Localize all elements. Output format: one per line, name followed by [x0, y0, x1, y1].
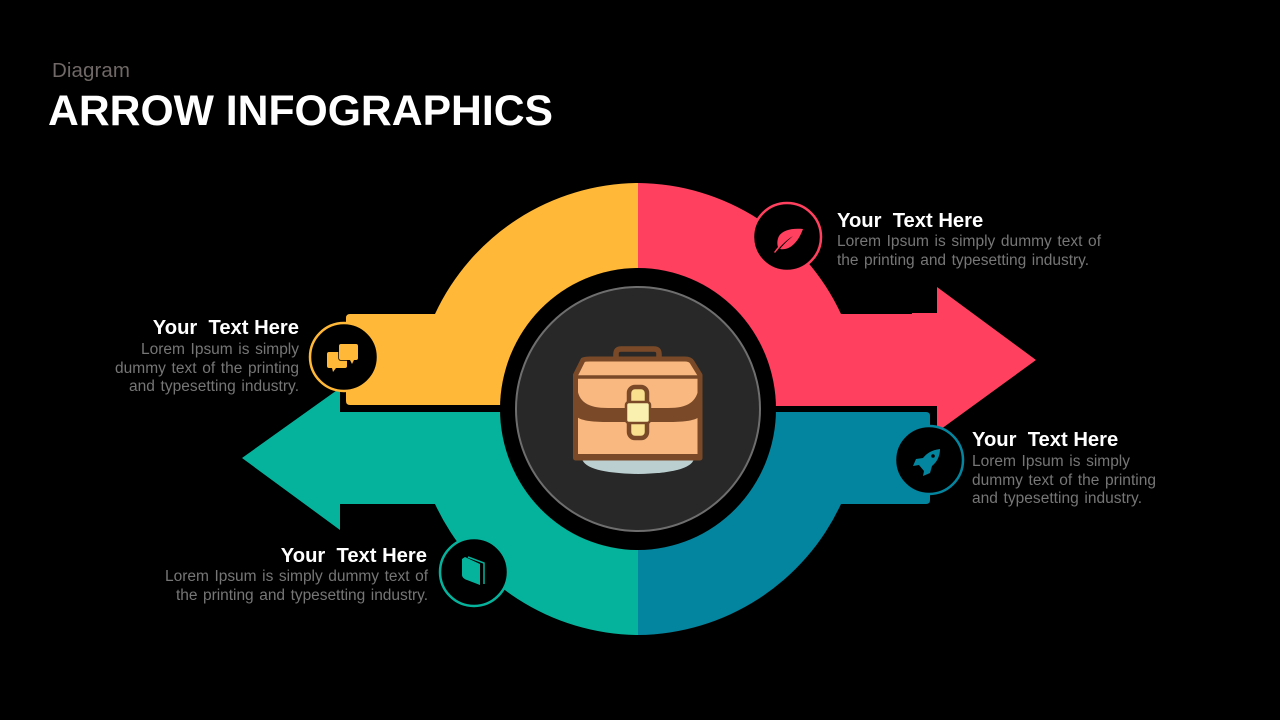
text block: bottom left: the printing and typesetting industry.: [176, 587, 428, 604]
text block: right: Lorem Ipsum is simply: [972, 453, 1130, 470]
text block: left: Your Text Here: [153, 317, 299, 339]
icon: briefcase: [575, 349, 700, 474]
text block: left: [115, 317, 299, 395]
text block: top right: the printing and typesetting industry.: [837, 252, 1089, 269]
icon badge: book: [440, 538, 508, 606]
text block: right: dummy text of the printing: [972, 472, 1156, 489]
text block: bottom left: Your Text Here: [281, 545, 427, 567]
icon badge: rocket: [895, 426, 963, 494]
text block: right: [972, 429, 1156, 507]
text block: left: Lorem Ipsum is simply: [141, 341, 299, 358]
central hub: [500, 268, 776, 550]
text block: right: and typesetting industry.: [972, 490, 1142, 507]
icon badge: leaf: [753, 203, 821, 271]
text block: bottom left: [165, 545, 429, 604]
icon badge: speech bubbles: [310, 323, 378, 391]
text block: top right: Your Text Here: [837, 210, 983, 232]
arrow: teal: [242, 388, 638, 635]
arrow: pink: [638, 183, 1036, 432]
text block: bottom left: Lorem Ipsum is simply dummy text of: [165, 568, 429, 585]
arrow: blue: [638, 412, 930, 635]
subtitle: Diagram: [52, 59, 130, 82]
text block: right: Your Text Here: [972, 429, 1118, 451]
text block: left: dummy text of the printing: [115, 360, 299, 377]
text block: top right: Lorem Ipsum is simply dummy text of: [837, 233, 1102, 250]
title: ARROW INFOGRAPHICS: [48, 88, 553, 135]
text block: left: and typesetting industry.: [129, 378, 299, 395]
arrow: yellow: [346, 183, 638, 405]
text block: top right: [837, 210, 1102, 269]
